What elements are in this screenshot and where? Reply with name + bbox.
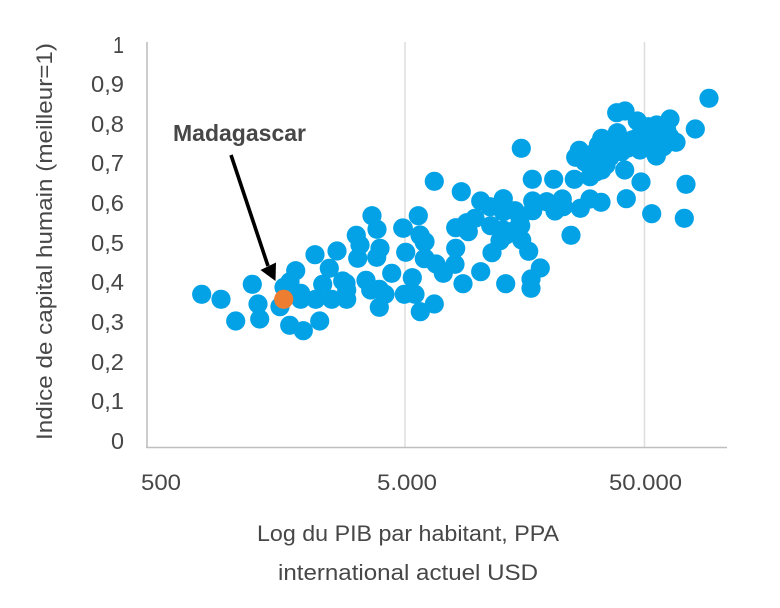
Madagascar data point (274, 290, 293, 309)
y axis tick labels: 1 (113, 32, 124, 58)
y axis tick labels: 0,4 (91, 269, 124, 295)
y axis tick labels: 0,1 (91, 388, 124, 414)
x axis tick labels: 500 (141, 470, 181, 495)
y axis tick labels: 0,6 (91, 190, 124, 216)
x axis tick labels: 50.000 (609, 470, 682, 495)
x axis title (257, 521, 559, 585)
y axis title: Indice de capital humain (meilleur=1) (32, 43, 57, 440)
x axis title: Log du PIB par habitant, PPA (257, 521, 559, 546)
y axis tick labels: 0 (111, 428, 124, 454)
arrow pointing to Madagascar (231, 155, 276, 281)
x axis title: international actuel USD (278, 560, 538, 585)
y axis tick labels: 0,3 (91, 309, 124, 335)
y axis tick labels: 0,8 (91, 111, 124, 137)
y axis tick labels: 0,7 (91, 150, 124, 176)
country data points (192, 89, 719, 340)
y axis tick labels: 0,2 (91, 349, 124, 375)
y axis tick labels: 0,5 (91, 230, 124, 256)
x axis tick labels (141, 470, 682, 495)
y axis tick labels (91, 32, 124, 454)
x axis tick labels: 5.000 (377, 470, 437, 495)
chart axes and gridlines (146, 42, 727, 448)
Madagascar label: Madagascar (173, 120, 306, 146)
y axis tick labels: 0,9 (91, 71, 124, 97)
